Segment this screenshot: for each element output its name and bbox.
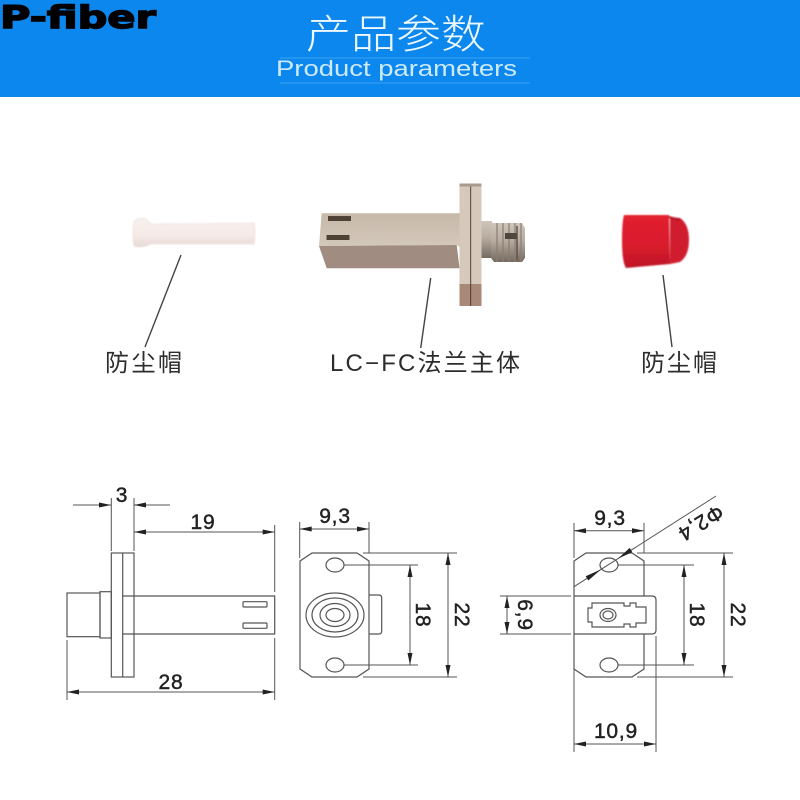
- LC port outline: [588, 603, 646, 627]
- flange plate: [460, 184, 482, 306]
- label: LC-FC adapter body: LC−FC法兰主体: [330, 350, 520, 377]
- dimension: 18: 18: [685, 603, 708, 627]
- photo: white dust cap: [133, 218, 255, 247]
- dimension: 9,3: [574, 507, 644, 558]
- dimension: 10,9: 10,9: [594, 720, 638, 743]
- photo: red dust cap: [622, 215, 689, 268]
- dimension: 22: 22: [726, 603, 749, 627]
- dimension: 9,3: 9,3: [319, 505, 351, 528]
- dimension: hole diameter: [574, 496, 727, 587]
- photo: LC-FC adapter body: [319, 184, 525, 306]
- technical drawing: side view: [67, 484, 275, 700]
- threaded FC barrel: [481, 221, 525, 262]
- dimension: 9,3: 9,3: [594, 507, 626, 530]
- title: product parameters (Chinese): 产品参数: [306, 3, 486, 60]
- subtitle: Product parameters: Product parameters: [276, 56, 517, 81]
- leader line: adapter: [421, 278, 431, 348]
- square LC housing: [319, 206, 468, 268]
- dimension: 28: [67, 638, 275, 700]
- dimension: 22: 22: [450, 603, 473, 627]
- header banner: [0, 0, 800, 97]
- plate outline: [574, 553, 656, 677]
- dimension: 6,9: [500, 596, 571, 634]
- leader line: white dust cap: [145, 255, 181, 347]
- side view outline: [67, 553, 275, 677]
- dimension: 22: [637, 553, 749, 677]
- dimension: 3: 3: [116, 484, 128, 507]
- plate outline: [300, 553, 382, 677]
- FC concentric circles: [306, 593, 364, 637]
- dimension: 18: 18: [411, 603, 434, 627]
- label: dust cap right: 防尘帽: [641, 350, 717, 377]
- dimension: hole diameter: Φ2,4: [674, 500, 727, 545]
- logo: P-fiber: P-fiber: [0, 0, 157, 36]
- dimension: 28: 28: [159, 671, 183, 694]
- dimension: 10,9: [574, 636, 656, 752]
- dimension: 18: [618, 565, 708, 665]
- dimension: 22: [363, 553, 473, 677]
- label: dust cap left: 防尘帽: [105, 350, 182, 377]
- dimension: 6,9: 6,9: [513, 599, 536, 631]
- dimension: 19: 19: [191, 511, 215, 534]
- dimension: 9,3: [300, 505, 369, 558]
- leader line: red dust cap: [663, 275, 672, 347]
- technical drawing: LC end view: [500, 496, 749, 752]
- dimension: 3: [73, 484, 170, 551]
- dimension: 18: [344, 565, 434, 665]
- technical drawing: FC end view: [300, 505, 473, 677]
